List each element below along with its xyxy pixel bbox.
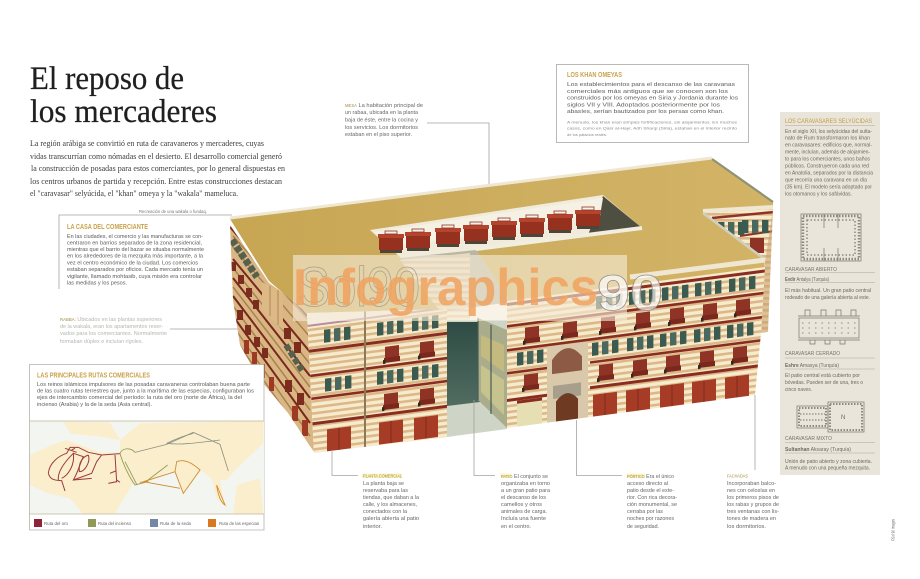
plan: caravasar cerrado: [798, 310, 860, 344]
callout: patio: Incluía una fuente: [501, 516, 546, 522]
callout: mesa: los servicios. Los dormitorios: [345, 125, 418, 131]
text: rutas: Los reinos islámicos impulsores de las posadas caravaneras controlaban buena parte: [37, 382, 250, 388]
text: la casa del comerciante: las medidas y los pesos.: [67, 280, 127, 286]
callout: planta comercial: calle, y los almacenes,: [363, 502, 417, 508]
text: los khan omeyas: comerciales más antiguos que se conocen son los: [567, 89, 728, 95]
callout: mesa: baja de éste, entre la cocina y: [345, 118, 418, 124]
heading: la casa del comerciante: LA CASA DEL COMERCIANTE: [67, 224, 148, 231]
intro text: la construcción de posadas para estos comerciantes, por lo general dispuestas en: [31, 163, 286, 173]
text: los khan omeyas: abasíes, serían bautizados por los persas como khan.: [567, 109, 725, 115]
plan: caravasar mixto: [797, 402, 864, 432]
callout: mesa: estaban en el piso superior.: [345, 132, 412, 138]
callout: planta comercial: interior.: [363, 524, 382, 530]
text: selyúcidas: to para los comerciantes, unos baños: [785, 156, 870, 162]
title: [30, 61, 217, 130]
callout: planta comercial: galería abierta al patio: [363, 516, 419, 522]
panel: los caravasares selyúcidas: bóvedas. Pueden ser de una, tres o: [785, 380, 863, 386]
watermark: infographics90: 90: [597, 265, 663, 321]
label: caravasar cerrado: CARAVASAR CERRADO: [785, 351, 840, 357]
text: selyúcidas: [785, 129, 873, 198]
upper balconies: [378, 207, 601, 253]
callout: fachadas: tres ventanas con lis-: [727, 509, 779, 515]
panel: los caravasares selyúcidas: Evdir Antalya (Turquía): [785, 277, 829, 283]
heading: los khan omeyas: LOS KHAN OMEYAS: [567, 72, 622, 79]
callout: fachadas: nes con celosías en: [727, 488, 775, 494]
back right wall: [703, 208, 774, 333]
callout: rabba: formaban dúplex e incluían rígoles.: [60, 339, 143, 345]
callout: patio: el descanso de los: [501, 495, 546, 501]
front face: right block: [505, 266, 767, 430]
text: selyúcidas: nato de Rum transformaron los khan: [785, 136, 870, 142]
legend: Ruta del incienso: [98, 521, 132, 526]
callout: patio: en el centro.: [501, 524, 531, 530]
panel: los caravasares selyúcidas: El patio central está cubierto por: [785, 373, 860, 379]
text: la casa del comerciante: mientras que el barrio del bazar se situaba normalmente: [67, 247, 204, 253]
heading: rutas: LAS PRINCIPALES RUTAS COMERCIALES: [37, 372, 150, 380]
callout: rabba: de la wakala, eran los apartamentos reser-: [60, 324, 163, 330]
text: selyúcidas: los otomanos y los safávidas.: [785, 192, 852, 198]
callout: patio: PATIO El conjunto se: [501, 474, 548, 480]
callout: rabba: [60, 317, 242, 345]
label: caravasar abierto: CARAVASAR ABIERTO: [785, 267, 837, 273]
callout: mesa: MESA La habitación principal de: [345, 103, 423, 109]
note: los khan omeyas: A menudo, los khan eran simples fortificaciones, sin alojamientos. En muchos: [567, 120, 737, 124]
intro text: vidas transcurrían como nómadas en el desierto. El desarrollo comercial generó: [30, 151, 282, 161]
callout: pórtico: cerraba por las: [627, 509, 663, 515]
infographic: El reposo de los mercaderes: [29, 64, 896, 541]
callout: planta comercial: PLANTA COMERCIAL: [363, 474, 403, 478]
callout: pórtico: [576, 420, 677, 530]
panel: los caravasares selyúcidas: Sultanhan Aksaray (Turquía): [785, 447, 851, 453]
panel: los caravasares selyúcidas: rodeado de una galería abierta al este.: [785, 295, 870, 301]
text: rutas: ejes de intercambio comercial del período: la ruta del oro (norte de África), la del: [37, 394, 242, 401]
text: los khan omeyas: siglos VII y VIII. Adoptados posteriormente por los: [567, 102, 720, 108]
text: selyúcidas: públicos. Construyeron cada una red: [785, 164, 869, 170]
text: la casa del comerciante: vez el centro económico de la ciudad. Los comercios: [67, 260, 198, 266]
watermark: infographics90: Sol90: [298, 255, 420, 318]
note: los khan omeyas: de los palacios reales.: [567, 132, 607, 137]
callout: fachadas: FACHADAS: [727, 474, 748, 478]
intro text: La región arábiga se convirtió en ruta de caravaneros y mercaderes, cuyas: [30, 138, 265, 148]
callout: planta comercial: reservaba para las: [363, 488, 408, 494]
callout: planta comercial: conectados con la: [363, 509, 408, 515]
label: caravasar mixto: CARAVASAR MIXTO: [785, 436, 832, 442]
callout: fachadas: tones de madera en: [727, 516, 776, 522]
callout: pórtico: patio desde el exte-: [627, 488, 674, 494]
text: selyúcidas: en caravasares: edificios que, normal-: [785, 142, 872, 148]
text: la casa del comerciante: En las ciudades, el comercio y las manufacturas se con-: [67, 234, 203, 240]
roof: [230, 159, 773, 313]
map: trade routes: [30, 421, 264, 514]
text: rutas: [37, 382, 254, 408]
text: selyúcidas: mente, incluían, además de alojamien-: [785, 150, 870, 156]
intro text: [30, 138, 286, 198]
text: selyúcidas: (35 km). El modelo sería adoptado por: [785, 184, 872, 190]
front face: left block: [307, 309, 447, 453]
title: los mercaderes: [30, 94, 217, 130]
central courtyard opening: [370, 195, 642, 311]
callout: fachadas: los dormitorios.: [727, 524, 766, 530]
callout: pórtico: de seguridad.: [627, 524, 659, 530]
panel: los caravasares selyúcidas: A menudo con una pequeña mezquita.: [785, 466, 870, 472]
text: selyúcidas: en Anatolia, separados por la distancia: [785, 170, 873, 176]
title: El reposo de: [30, 61, 184, 97]
callout: fachadas: [727, 395, 779, 530]
callout: patio: [474, 400, 551, 530]
text: la casa del comerciante: centraron en barrios separados de la zona residencial,: [67, 240, 202, 246]
text: la casa del comerciante: vigilante, llamado mohtasib, cuya misión era controlar: [67, 274, 202, 280]
panel: los caravasares selyúcidas: Unión de patio abierto y zona cubierta.: [785, 459, 872, 465]
text: los khan omeyas: Los establecimientos para el descanso de las caravanas: [567, 82, 735, 88]
plan: caravasar mixto: N: [841, 415, 845, 421]
text: la casa del comerciante: [67, 234, 204, 286]
callout: pórtico: PÓRTICO Era el único: [627, 474, 674, 480]
callout: patio: organizaba en torno: [501, 481, 550, 487]
intro text: el "caravasar" selyúcida, el "khan" omeya y la "wakala" mameluca.: [30, 188, 238, 198]
note: los khan omeyas: casos, como en Qasr al-Hayr, Adh Sharqi (Siria), estaban en el interior recinto: [567, 126, 738, 130]
callout: planta comercial: tiendas, que daban a la: [363, 495, 420, 501]
portal: [547, 341, 588, 423]
callout: patio: animales de carga.: [501, 509, 547, 515]
callout: planta comercial: [332, 450, 420, 530]
callout: pórtico: noches por razones: [627, 516, 674, 522]
text: rutas: de las cuatro rutas terrestres que, junto a la marítima de las especias, configuraban los: [37, 388, 254, 394]
callout: fachadas: Incorporaban balco-: [727, 481, 776, 487]
legend: [34, 519, 259, 527]
callout: planta comercial: La planta baja se: [363, 481, 404, 487]
legend: Ruta de las especias: [219, 521, 259, 526]
callout: rabba: RABBA: Ubicados en las plantas superiores: [60, 317, 162, 323]
text: los khan omeyas: [567, 82, 738, 115]
text: la casa del comerciante: en los alrededores de la mezquita más importante, a la: [67, 254, 204, 260]
callout: pórtico: ción monumental, se: [627, 502, 677, 508]
caption: recreation: Recreación de una wakala o fundaq.: [139, 209, 207, 214]
legend: Ruta de la seda: [160, 521, 192, 526]
callout: mesa: un rabaa, ubicada en la planta: [345, 110, 419, 116]
callout: patio: a un gran patio para: [501, 488, 551, 494]
watermark: infographics90: Infographics: [293, 259, 598, 317]
text: la casa del comerciante: estaban separados por oficios. Cada mercado tenía un: [67, 267, 203, 273]
text: selyúcidas: En el siglo XII, los selyúcidas del sulta-: [785, 129, 872, 135]
text: selyúcidas: que recorría una caravana en un día: [785, 178, 867, 184]
building illustration: wakala: [230, 158, 774, 457]
text: los khan omeyas: construidos por los omeyas en Siria y Jordania durante los: [567, 96, 738, 102]
side face: [230, 225, 314, 452]
callout: fachadas: los primeros pisos de: [727, 495, 779, 501]
callout: mesa: [345, 103, 489, 190]
legend: Ruta del oro: [44, 521, 69, 526]
callout: fachadas: los rabas y grupos de: [727, 502, 779, 508]
note: los khan omeyas: [567, 120, 738, 137]
panel: la casa del comerciante: [59, 215, 232, 289]
credit: ©Sol 90 Images: [890, 518, 896, 541]
callout: pórtico: rior. Con rica decora-: [627, 495, 677, 501]
text: rutas: incienso (Arabia) y la de la seda (Asia central).: [37, 402, 152, 408]
callout: pórtico: acceso directo al: [627, 481, 668, 487]
panel: los caravasares selyúcidas: [780, 112, 880, 475]
callout: rabba: vados para los comerciantes. Normalmente: [60, 331, 167, 337]
panel: los caravasares selyúcidas: Eshre Amasya (Turquía): [785, 363, 839, 369]
panel: los caravasares selyúcidas: cinco naves.: [785, 387, 812, 393]
heading: selyúcidas: LOS CARAVASARES SELYÚCIDAS: [785, 118, 872, 125]
callout: patio: camellos y otros: [501, 502, 542, 508]
panel: los khan omeyas: [556, 64, 748, 142]
panel: las principales rutas comerciales: [30, 364, 264, 530]
panel: los caravasares selyúcidas: El más habitual. Un gran patio central: [785, 288, 871, 294]
intro text: los centros urbanos de partida y recepción. Entre estas construcciones destacan: [30, 176, 283, 186]
plan: caravasar abierto: [801, 214, 861, 261]
courtyard interior: [447, 318, 507, 437]
